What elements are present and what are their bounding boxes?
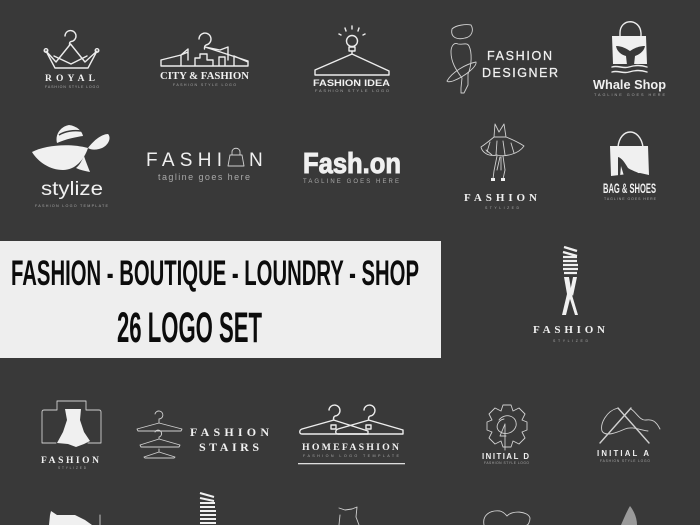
tagline: STYLIZED [553, 339, 588, 343]
brand name [482, 49, 558, 80]
banner background [0, 241, 441, 358]
tagline: tagline goes here [158, 172, 250, 182]
logo: Fashion bag wordmark: N [249, 150, 263, 171]
icon: needles and thread [600, 408, 660, 443]
icon: bag with heel [610, 132, 649, 177]
icon: gear with letter [487, 405, 527, 450]
cropped logo row [49, 493, 637, 525]
icon: crown hanger [44, 31, 99, 68]
logo: Fashion Stairs [137, 411, 269, 458]
logo: Fashion Idea [313, 26, 390, 93]
banner panel [0, 241, 441, 358]
brand name [190, 425, 269, 454]
icon: fish with hat [32, 125, 110, 172]
icon: ballerina dress [481, 124, 524, 179]
icon: cropped dress outline [339, 507, 359, 525]
logo: HomeFashion [298, 405, 405, 464]
underline [298, 463, 405, 464]
brand name: FASHI [146, 150, 222, 171]
tagline: FASHION LOGO TEMPLATE [303, 454, 400, 458]
logo: Initial D [482, 405, 529, 465]
brand name: FASHION [533, 324, 605, 336]
logo: Whale Shop [593, 22, 666, 97]
logo: Fashion Designer [447, 25, 558, 93]
icon: bag with whale tail [612, 22, 647, 73]
icon: cropped frame line [99, 515, 101, 525]
brand name: Fash.on [303, 148, 401, 180]
brand name: CITY & FASHION [160, 71, 250, 82]
logo: Bag & Shoes [603, 132, 657, 201]
logo: Fashion bag wordmark [146, 148, 263, 182]
icon: city hanger [161, 33, 248, 66]
brand name: HOMEFASHION [302, 442, 399, 453]
icon: cropped striped skirt [200, 493, 216, 523]
icon: striped skirt and legs [562, 247, 578, 315]
tagline: FASHION STYLE LOGO [484, 461, 529, 465]
tagline: FASHION LOGO TEMPLATE [35, 204, 109, 208]
logo: Fash.on [303, 148, 401, 185]
tagline: FASHION STYLE LOGO [600, 459, 650, 463]
logo: Fashion legs [533, 247, 605, 343]
icon: camera frame with dress [42, 401, 101, 447]
tagline: FASHION STYLE LOGO [45, 85, 99, 89]
brand name: STAIRS [199, 440, 259, 454]
brand name: Whale Shop [593, 78, 666, 92]
icon: bulb hanger [315, 26, 389, 75]
tagline: TAGLINE GOES HERE [303, 179, 399, 185]
logo: Initial A [597, 408, 660, 463]
brand name: FASHION [464, 192, 537, 204]
logo: Fashion dress frame [41, 401, 101, 470]
icon: three stacked hangers [137, 411, 182, 458]
tagline: TAGLINE GOES HERE [604, 197, 657, 201]
brand name: BAG & SHOES [603, 180, 656, 196]
tagline: STYLIZED [485, 206, 519, 210]
logo: Stylize [32, 125, 110, 208]
brand name: stylize [41, 178, 103, 200]
brand name: FASHION [41, 456, 99, 466]
icon: cropped white shape [49, 511, 92, 525]
logo: City & Fashion [160, 33, 250, 87]
tagline: FASHION STYLE LOGO [173, 83, 236, 87]
tagline: FASHION STYLE LOGO [315, 88, 389, 93]
brand name: FASHION IDEA [313, 78, 390, 89]
icon: cropped cloud outline [484, 511, 530, 525]
logo: Fashion dress [464, 124, 537, 210]
icon: dancer shoes [491, 178, 505, 181]
icon: cropped feather [621, 506, 637, 525]
banner subheading: 26 LOGO SET [117, 304, 262, 352]
brand name: ROYAL [45, 74, 95, 84]
tagline: STYLIZED [58, 466, 87, 470]
icon: bag letter O [228, 148, 244, 166]
brand name: FASHION [190, 425, 269, 439]
brand name: INITIAL D [482, 452, 529, 461]
icon: two house hangers [300, 405, 403, 434]
brand name: INITIAL A [597, 449, 649, 458]
brand name: FASHION [487, 49, 552, 63]
brand name: DESIGNER [482, 66, 558, 80]
icon: figure line art [447, 25, 476, 93]
logo: Royal [44, 31, 99, 89]
tagline: TAGLINE GOES HERE [594, 93, 665, 97]
